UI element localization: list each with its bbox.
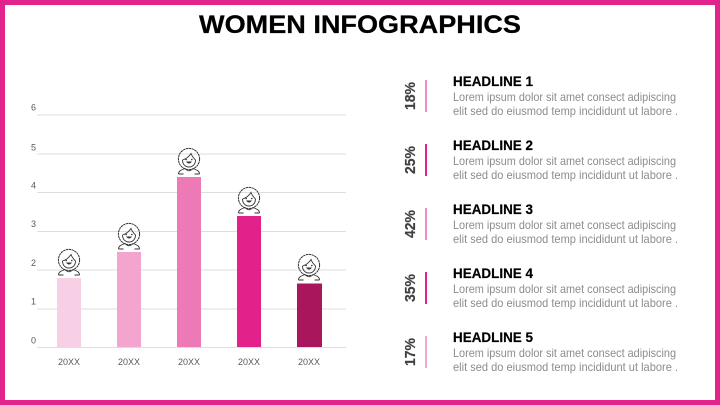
title: WOMEN INFOGRAPHICS [199, 11, 521, 39]
icon: woman 5 [298, 254, 320, 280]
list item 2: elit sed do eiusmod temp incididunt ut labore . [453, 168, 678, 182]
y axis labels: 4 [31, 180, 36, 190]
icon: woman 4 [238, 187, 260, 213]
x axis labels [58, 357, 320, 367]
list item 3: Lorem ipsum dolor sit amet consect adipiscing [453, 218, 676, 232]
x axis labels: 20XX [238, 357, 260, 367]
list item 4: elit sed do eiusmod temp incididunt ut labore . [453, 296, 678, 310]
list item 1: Lorem ipsum dolor sit amet consect adipiscing [453, 90, 676, 104]
y axis labels: 2 [31, 258, 36, 268]
list item 2 [402, 137, 678, 182]
list item 5: HEADLINE 5 [453, 329, 533, 345]
list item 3: HEADLINE 3 [453, 201, 533, 217]
list item 5: elit sed do eiusmod temp incididunt ut labore . [453, 360, 678, 374]
y axis labels: 1 [31, 296, 36, 306]
x axis labels: 20XX [298, 357, 320, 367]
y axis labels: 3 [31, 219, 36, 229]
x axis labels: 20XX [178, 357, 200, 367]
list item 1 [402, 73, 678, 118]
list item 5 [402, 329, 678, 374]
list item 4: Lorem ipsum dolor sit amet consect adipiscing [453, 282, 676, 296]
list item 4: HEADLINE 4 [453, 265, 533, 281]
list item 4: 35% [402, 274, 419, 302]
y axis labels [31, 102, 36, 346]
list item 3: 42% [402, 210, 419, 238]
list item 3 [402, 201, 678, 246]
x axis labels: 20XX [58, 357, 80, 367]
list item 2: HEADLINE 2 [453, 137, 533, 153]
icon: woman 3 [178, 148, 200, 174]
list item 4 [402, 265, 678, 310]
x axis labels: 20XX [118, 357, 140, 367]
list item 1: HEADLINE 1 [453, 73, 533, 89]
list item 1: 18% [402, 82, 419, 110]
list item 1: elit sed do eiusmod temp incididunt ut labore . [453, 104, 678, 118]
list item 2: 25% [402, 146, 419, 174]
icon: woman 1 [58, 249, 80, 275]
y axis labels: 0 [31, 336, 36, 346]
bars [57, 177, 322, 347]
list item 2: Lorem ipsum dolor sit amet consect adipiscing [453, 154, 676, 168]
list item 5: Lorem ipsum dolor sit amet consect adipiscing [453, 346, 676, 360]
list item 3: elit sed do eiusmod temp incididunt ut labore . [453, 232, 678, 246]
list item 5: 17% [402, 338, 419, 366]
icon: woman 2 [118, 223, 140, 249]
y axis labels: 5 [31, 142, 36, 152]
y axis labels: 6 [31, 102, 36, 112]
bar chart [31, 102, 346, 367]
